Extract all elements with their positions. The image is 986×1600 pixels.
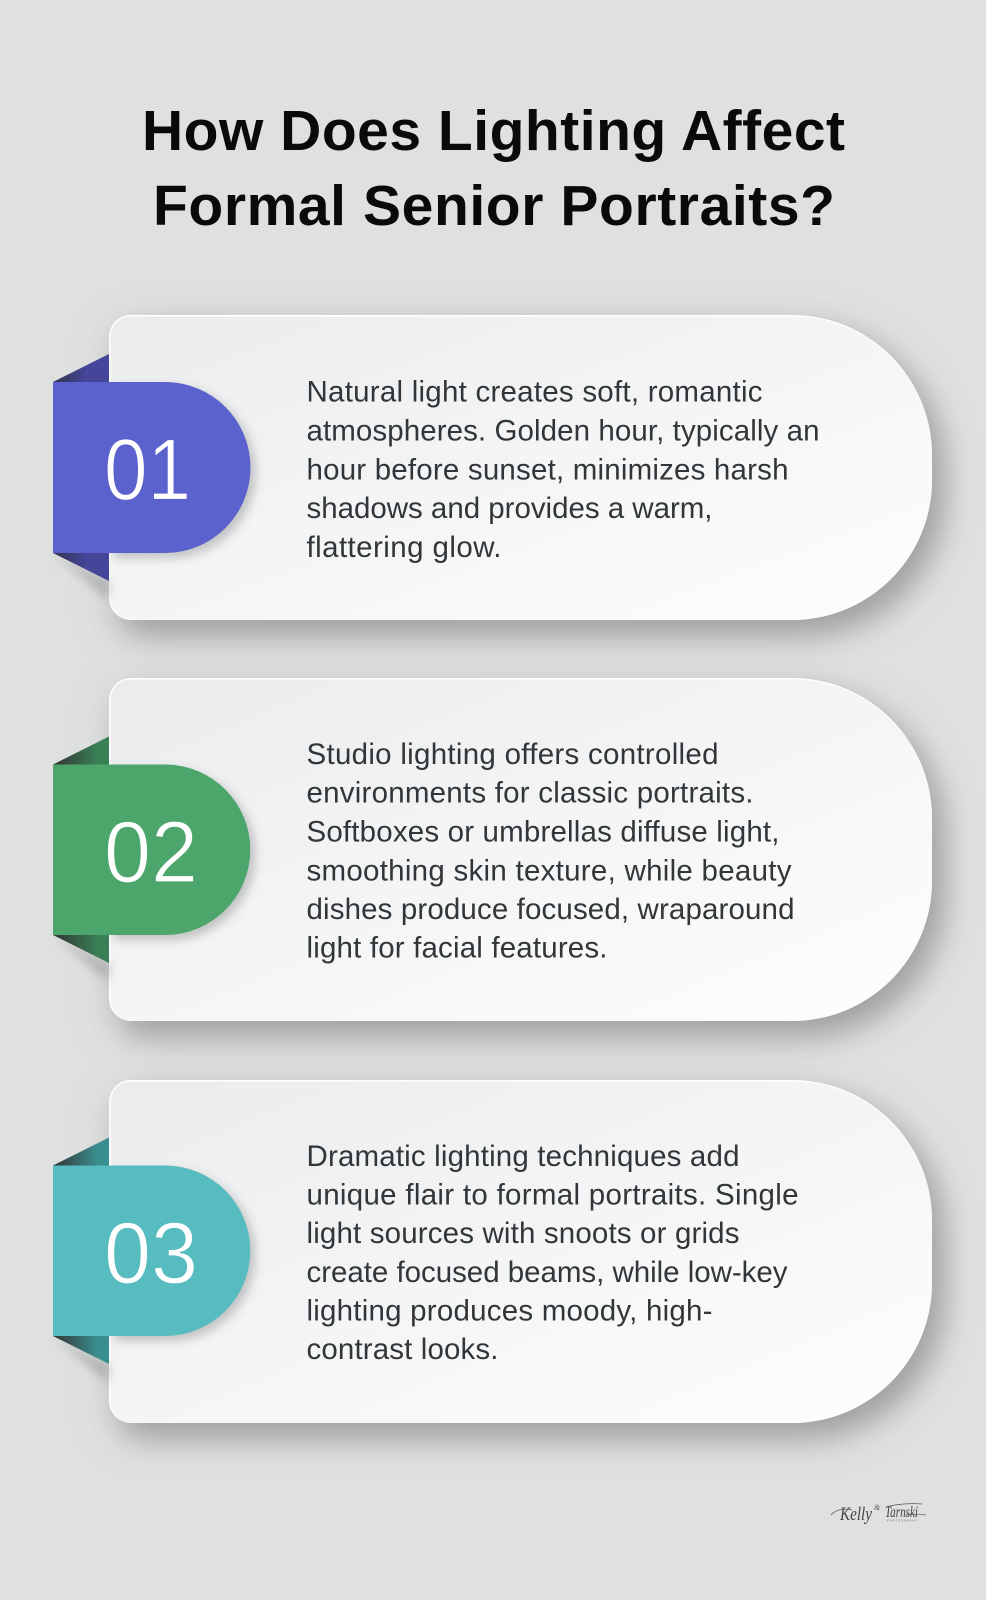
- title: How Does Lighting Affect: [142, 99, 845, 163]
- panel: step 1: [53, 315, 944, 635]
- body text 1: flattering glow.: [306, 531, 502, 564]
- ribbon folds 1: [53, 354, 109, 581]
- panel: step 2: [53, 678, 944, 1036]
- number 01: 01: [104, 422, 191, 518]
- card wide shadow 1: [113, 327, 936, 632]
- logo: signature: PHOTOGRAPHY: [887, 1520, 917, 1522]
- body text 3: contrast looks.: [306, 1333, 498, 1366]
- card wide shadow 2: [113, 690, 936, 1033]
- card highlight 2: [109, 678, 932, 1021]
- body text 3: create focused beams, while low-key: [306, 1256, 788, 1289]
- card highlight 3: [109, 1080, 932, 1423]
- fold shadow 1: [53, 553, 109, 600]
- body text 2: Softboxes or umbrellas diffuse light,: [306, 816, 780, 848]
- card 1: [110, 316, 932, 620]
- card 3: [110, 1082, 932, 1423]
- title: [142, 99, 845, 238]
- card shadow 2: [121, 693, 944, 1036]
- card shadow 3: [121, 1095, 944, 1438]
- body text 3: Dramatic lighting techniques add: [306, 1140, 740, 1173]
- body text 1: atmospheres. Golden hour, typically an: [306, 414, 820, 448]
- logo: signature: Kelly: [839, 1504, 872, 1525]
- card wide shadow 3: [113, 1092, 936, 1435]
- logo: signature: [831, 1503, 926, 1525]
- card highlight 1: [109, 315, 932, 620]
- panel: step 3: [53, 1080, 944, 1438]
- badge 3: [53, 1166, 250, 1336]
- body text 2: environments for classic portraits.: [306, 777, 754, 810]
- ribbon folds 2: [53, 736, 109, 963]
- badge shadow 1: [114, 387, 256, 558]
- card 2: [110, 680, 932, 1021]
- body text 3: unique flair to formal portraits. Single: [306, 1179, 798, 1212]
- body text 1: hour before sunset, minimizes harsh: [306, 454, 788, 486]
- badge 1: [53, 382, 250, 553]
- body text 1: [306, 376, 820, 564]
- badge shadow 3: [114, 1170, 255, 1341]
- logo: signature: Tarnski: [885, 1504, 918, 1521]
- badge 2: [53, 764, 250, 935]
- body text 3: [306, 1140, 798, 1366]
- body text 2: [306, 738, 794, 965]
- body text 2: smoothing skin texture, while beauty: [306, 854, 792, 888]
- body text 3: lighting produces moody, high-: [306, 1295, 712, 1328]
- body text 3: light sources with snoots or grids: [306, 1217, 740, 1250]
- number 03: 03: [104, 1205, 198, 1302]
- ribbon folds 3: [53, 1138, 109, 1364]
- body text 2: light for facial features.: [306, 932, 608, 965]
- title: Formal Senior Portraits?: [153, 174, 835, 238]
- number 02: 02: [104, 804, 198, 901]
- body text 1: shadows and provides a warm,: [306, 492, 712, 525]
- fold shadow 2: [53, 935, 109, 982]
- body text 2: dishes produce focused, wraparound: [306, 893, 794, 926]
- card shadow 1: [121, 330, 944, 635]
- badge shadow 2: [114, 770, 255, 940]
- body text 2: Studio lighting offers controlled: [306, 738, 718, 771]
- body text 1: Natural light creates soft, romantic: [306, 376, 762, 409]
- logo: signature: &: [874, 1503, 881, 1512]
- fold shadow 3: [53, 1336, 109, 1383]
